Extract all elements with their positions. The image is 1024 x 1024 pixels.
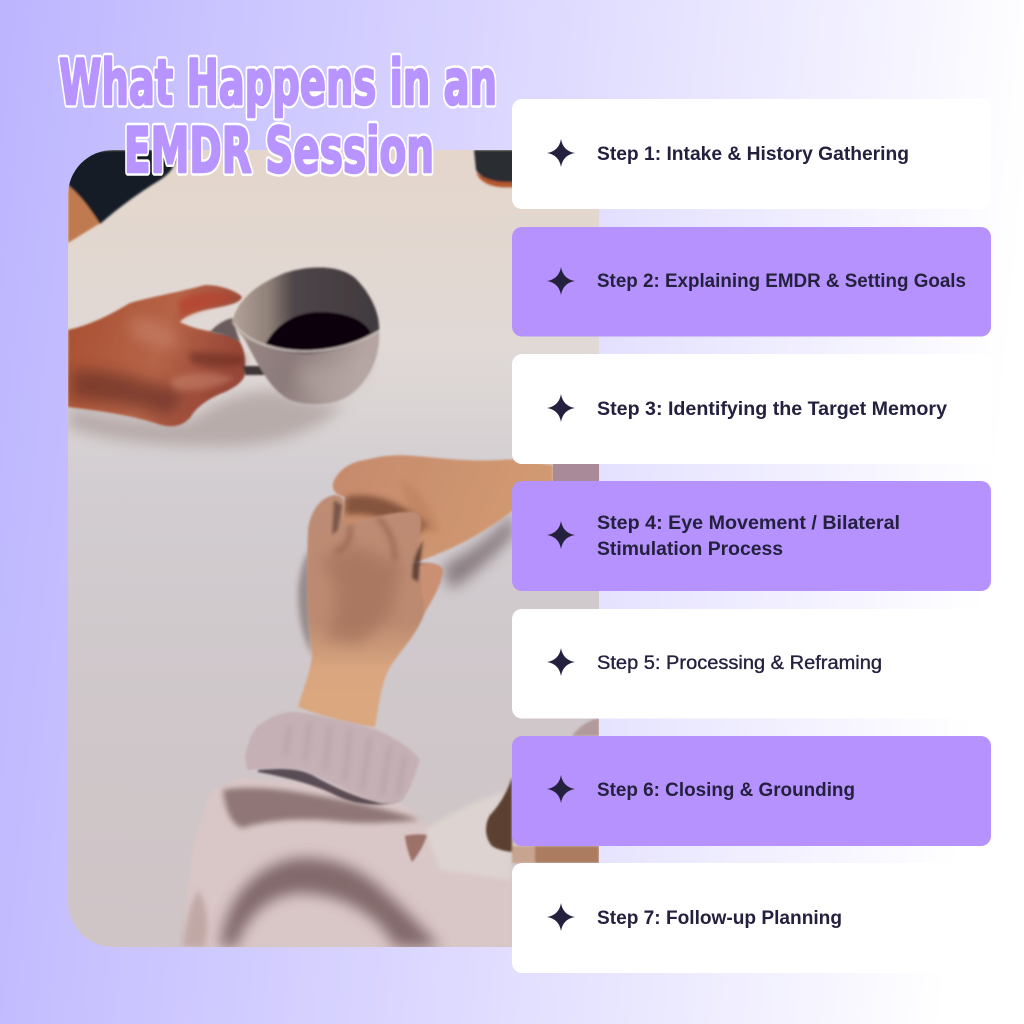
title: What Happens in an (59, 46, 497, 119)
step 2 card (512, 227, 991, 336)
step 4 card (512, 481, 991, 591)
step 4 card: Step 4: Eye Movement / Bilateral (597, 513, 900, 534)
step 7 card: Step 7: Follow-up Planning (597, 908, 842, 929)
step 6 card (512, 736, 991, 846)
photo: hands holding across a table with a coffee cup (68, 150, 599, 947)
step 3 card: Step 3: Identifying the Target Memory (597, 399, 947, 420)
icon: sparkle (547, 775, 575, 803)
icon: sparkle (547, 139, 575, 167)
top-right object (474, 150, 515, 187)
icon: sparkle (547, 521, 575, 549)
step 6 card: Step 6: Closing & Grounding (597, 780, 855, 801)
title: What Happens in an (59, 46, 497, 119)
top-left dark sleeve and skin (68, 150, 178, 243)
left hand holding the cup (68, 285, 245, 426)
icon: sparkle (547, 267, 575, 295)
step 1 card (512, 99, 991, 209)
title: EMDR Session (124, 114, 434, 187)
icon: sparkle (547, 394, 575, 422)
step 5 card (512, 609, 991, 718)
icon: sparkle (547, 903, 575, 931)
step 5 card: Step 5: Processing & Reframing (597, 653, 882, 674)
coffee cup (210, 268, 379, 404)
sweater body and cuff (183, 712, 512, 947)
lower hand clasping (298, 495, 443, 727)
step 2 card: Step 2: Explaining EMDR & Setting Goals (597, 271, 966, 292)
step 7 card (512, 863, 991, 973)
title: EMDR Session (124, 114, 434, 187)
icon: sparkle (547, 648, 575, 676)
step 4 card: Stimulation Process (597, 539, 783, 560)
sweater sleeve at right edge (553, 464, 599, 482)
step 1 card: Step 1: Intake & History Gathering (597, 144, 909, 165)
title (59, 46, 497, 187)
hair and shoulder at lower right (486, 718, 599, 863)
right forearm and hand from the right edge (333, 455, 553, 562)
table shadow below hand and cup (68, 390, 345, 446)
shadow under joined hands (298, 512, 513, 655)
step 3 card (512, 354, 991, 464)
